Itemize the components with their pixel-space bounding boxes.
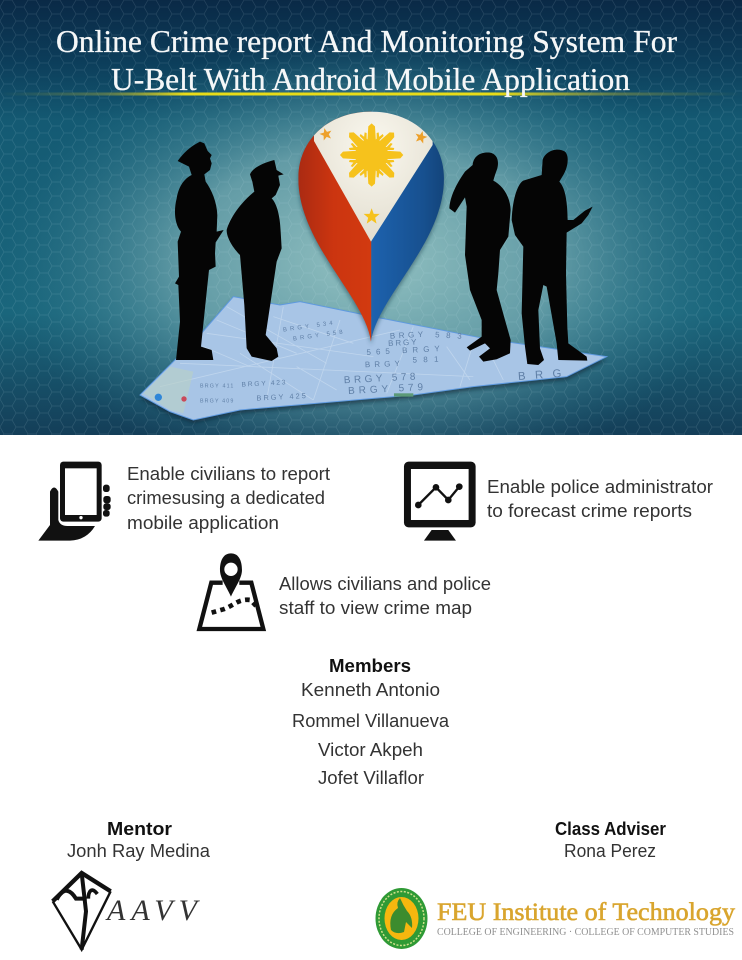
class adviser — [555, 819, 666, 861]
hero banner — [0, 0, 742, 435]
title — [56, 23, 677, 97]
text: report crimes: Enable civilians to report — [127, 464, 330, 484]
mentor: Jonh Ray Medina — [67, 841, 211, 861]
class adviser: Rona Perez — [564, 841, 656, 861]
title: U-Belt With Android Mobile Application — [111, 61, 630, 97]
civilian on phone silhouette — [449, 153, 511, 362]
text: crime map: staff to view crime map — [279, 598, 472, 618]
text: forecast crime: to forecast crime reports — [487, 501, 692, 521]
flag sun — [340, 123, 403, 187]
map of U-Belt: BRGY — [365, 359, 401, 369]
mentor — [67, 819, 211, 861]
text: report crimes: mobile application — [127, 513, 279, 533]
text: crime map: Allows civilians and police — [279, 574, 491, 594]
members list — [292, 656, 450, 788]
members list: Members — [329, 656, 411, 676]
text: crime map — [279, 574, 491, 618]
map of U-Belt: 583 — [435, 330, 463, 341]
map of U-Belt: 581 — [412, 355, 439, 365]
mentor: Mentor — [107, 819, 172, 839]
civilian texting silhouette — [512, 150, 593, 365]
members list: Rommel Villanueva — [292, 711, 450, 731]
icon: monitor with line chart — [404, 462, 476, 541]
map of U-Belt: BRGY 425 — [256, 391, 306, 403]
text: report crimes: crimesusing a dedicated — [127, 488, 325, 508]
police officers — [175, 142, 284, 361]
FEU seal — [376, 888, 428, 949]
map of U-Belt: BRGY 558 — [293, 330, 344, 343]
map of U-Belt: BRGY 579 — [348, 382, 424, 397]
FEU Institute of Technology logo: FEU Institute of Technology — [437, 899, 736, 926]
map of U-Belt: BRGY 409 — [200, 399, 233, 405]
icon: hand holding tablet — [38, 462, 111, 541]
AAVV logo: AAVV — [105, 894, 201, 927]
map of U-Belt: BRGY — [390, 330, 424, 341]
title: Online Crime report And Monitoring System For — [56, 23, 677, 59]
map of U-Belt — [140, 297, 607, 423]
map of U-Belt: BRGY 423 — [241, 379, 286, 389]
icon: map with pin — [199, 553, 263, 629]
text: report crimes — [127, 464, 330, 533]
FEU Institute of Technology logo — [376, 888, 736, 949]
FEU Institute of Technology logo: COLLEGE OF ENGINEERING · COLLEGE OF COMPUTER STUDIES — [437, 927, 734, 938]
text: forecast crime — [487, 477, 713, 521]
flag stars — [318, 127, 429, 224]
class adviser: Class Adviser — [555, 819, 666, 839]
map of U-Belt: BRGY — [388, 337, 417, 348]
map of U-Belt: BRGY 411 — [200, 383, 233, 389]
map of U-Belt: BRGY 578 — [344, 372, 416, 386]
map of U-Belt: 565 BRGY — [366, 344, 441, 357]
text: forecast crime: Enable police administrator — [487, 477, 713, 497]
Philippine flag map pin — [297, 107, 446, 345]
members list: Victor Akpeh — [318, 740, 423, 760]
members list: Kenneth Antonio — [301, 680, 440, 700]
title underline — [0, 92, 742, 96]
AAVV logo — [53, 873, 201, 950]
police officer 2 silhouette — [227, 160, 284, 361]
members list: Jofet Villaflor — [318, 768, 424, 788]
civilians — [449, 150, 593, 365]
map of U-Belt: BRG — [518, 368, 562, 383]
police officer 1 silhouette — [175, 142, 224, 360]
map of U-Belt: BRGY 534 — [283, 321, 334, 334]
